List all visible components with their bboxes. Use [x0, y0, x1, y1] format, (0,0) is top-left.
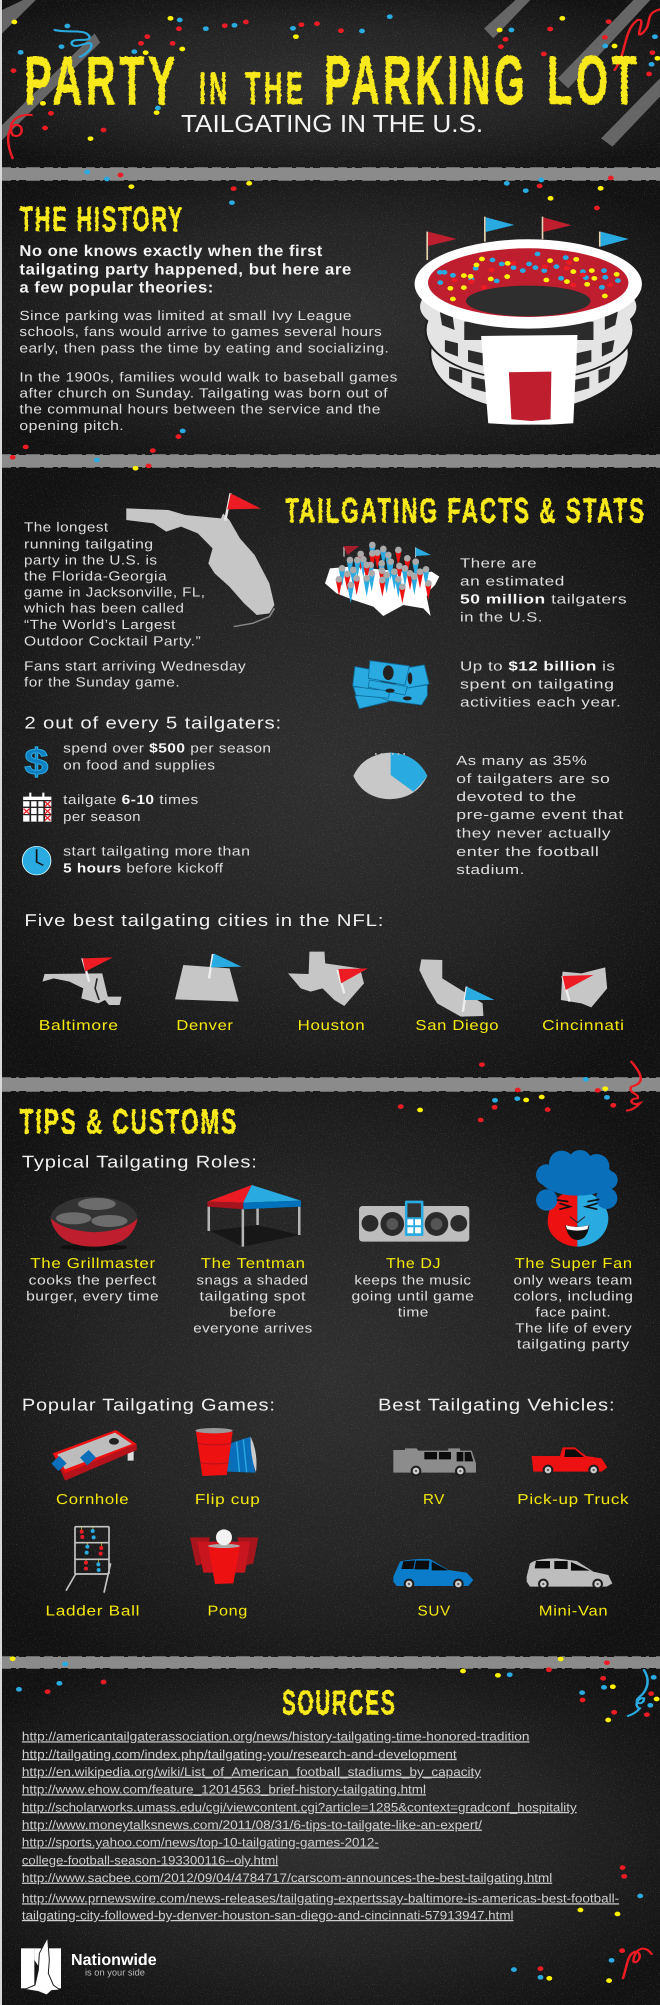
text: tailgate times: per season [63, 809, 141, 824]
parking lot stripes [2, 0, 660, 147]
role: dj: keeps the music [354, 1273, 471, 1288]
vehicle: pickup truck: Pick-up Truck [517, 1491, 629, 1507]
logo: nationwide: is on your side [85, 1967, 145, 1977]
role: super fan: The life of every [515, 1321, 632, 1336]
role: grillmaster: The Grillmaster [30, 1255, 156, 1271]
source links: http://americantailgaterassociation.org/news/history-tailgating-time-honored-tradition [22, 1730, 529, 1743]
theory one: Since parking was limited at small Ivy League [19, 308, 352, 323]
source links: http://en.wikipedia.org/wiki/List_of_American_football_stadiums_by_capacity [22, 1765, 481, 1779]
text: longest running party: The longest [24, 520, 109, 535]
title: party in the parking lot [24, 42, 641, 119]
city: denver [175, 953, 241, 1033]
city: cincinnati: Cincinnati [542, 1017, 625, 1033]
vehicle: rv: RV [423, 1491, 445, 1507]
role: dj: going until game [351, 1289, 474, 1304]
panel: facts and stats [22, 491, 646, 877]
icon: football pie chart [353, 753, 427, 799]
city: san diego: San Diego [415, 1017, 499, 1033]
text: 35 percent: pre-game event that [456, 807, 624, 822]
text: tailgate times: tailgate 6-10 times [63, 792, 199, 807]
theory two: opening pitch. [19, 418, 124, 433]
text: spend: on food and supplies [63, 758, 216, 772]
game: pong: Pong [208, 1603, 248, 1619]
text: 50 million: There are [460, 556, 537, 570]
role: tentman [193, 1185, 313, 1336]
source links: tailgating-city-followed-by-denver-houston-san-diego-and-cincinnati-57913947.html [22, 1908, 513, 1922]
intro text: a few popular theories: [19, 278, 214, 296]
heading: five best cities: Five best tailgating cities in the NFL: [24, 911, 384, 930]
text: 35 percent: of tailgaters are so [456, 771, 610, 786]
section dividers [2, 168, 660, 1668]
header: title region [2, 0, 660, 468]
game: flip cup [195, 1428, 261, 1507]
text: 35 percent [456, 753, 624, 877]
icon: florida map with flag [126, 493, 274, 627]
game: cornhole: Cornhole [56, 1491, 129, 1507]
title: party in the parking lot: THE [245, 63, 306, 114]
panel: the history [19, 200, 642, 433]
vehicle: minivan [527, 1558, 612, 1619]
city: cincinnati [542, 967, 625, 1033]
text: longest running party [24, 520, 246, 690]
panel: the history: THE HISTORY [20, 200, 184, 239]
role: tentman: before [229, 1305, 277, 1320]
theory two: after church on Sunday. Tailgating was born out of [19, 386, 388, 401]
city: houston: Houston [298, 1017, 365, 1033]
role: dj: The DJ [386, 1255, 441, 1271]
vehicle: rv [393, 1448, 476, 1507]
role: super fan: face paint. [535, 1305, 611, 1320]
heading: popular games: Popular Tailgating Games: [22, 1395, 276, 1414]
game: pong [190, 1529, 258, 1619]
heading: tips and customs: TIPS & CUSTOMS [20, 1102, 238, 1141]
panel: sources [13, 1659, 657, 1981]
role: grillmaster [26, 1197, 159, 1304]
text: start tailgating: start tailgating more than [63, 844, 250, 859]
panel: games [22, 1395, 276, 1619]
role: dj [351, 1201, 474, 1320]
role: dj: time [398, 1305, 429, 1320]
text: longest running party: which has been called [24, 601, 184, 615]
game: cornhole [51, 1430, 137, 1507]
text: 35 percent: enter the football [456, 844, 599, 859]
text: spend: spend over $500 per season [63, 741, 271, 756]
game: flip cup: Flip cup [195, 1491, 261, 1507]
text: start tailgating [63, 844, 250, 875]
panel: stat icons [325, 542, 439, 799]
text: 35 percent: they never actually [456, 826, 611, 840]
source links: http://www.ehow.com/feature_12014563_brief-history-tailgating.html [22, 1783, 426, 1796]
role: super fan: only wears team [513, 1273, 633, 1288]
vehicle: pickup truck [517, 1447, 629, 1507]
text: spend [63, 741, 271, 772]
game: ladder ball: Ladder Ball [45, 1603, 140, 1619]
source links: college-football-season-193300116--oly.html [22, 1853, 278, 1867]
city: san diego [415, 959, 499, 1033]
subtitle: TAILGATING IN THE U.S. [181, 110, 483, 137]
panel: five best cities [24, 911, 625, 1033]
theory one: schools, fans would arrive to games several hours [19, 324, 382, 339]
text: 12 billion: Up to $12 billion is [460, 659, 615, 674]
text: 12 billion [460, 659, 621, 710]
role: super fan: tailgating party [517, 1337, 630, 1352]
text: longest running party: Fans start arriving Wednesday [24, 659, 246, 674]
text: 50 million [460, 556, 627, 624]
text: 35 percent: As many as 35% [456, 753, 587, 768]
city: denver: Denver [176, 1017, 234, 1033]
intro text: tailgating party happened, but here are [19, 260, 352, 278]
title: party in the parking lot: PARTY [24, 42, 179, 119]
text: 50 million: 50 million tailgaters [460, 592, 627, 607]
city: baltimore: Baltimore [39, 1017, 119, 1033]
source links: http://www.moneytalksnews.com/2011/08/31/6-tips-to-tailgate-like-an-expert/ [22, 1818, 482, 1832]
theory one: early, then pass the time by eating and socializing. [19, 341, 389, 356]
confetti and streamers [13, 1659, 657, 1981]
role: super fan: colors, including [513, 1289, 633, 1304]
vehicle: minivan: Mini-Van [539, 1603, 608, 1619]
text: longest running party: “The World’s Largest [24, 617, 176, 632]
source links: http://tailgating.com/index.php/tailgating-you/research-and-development [22, 1747, 457, 1761]
text: longest running party: party in the U.S. is [24, 553, 157, 567]
text: 12 billion: spent on tailgating [460, 677, 615, 692]
icon: money stack [353, 661, 429, 709]
text: 35 percent: devoted to the [456, 789, 577, 804]
role: tentman: everyone arrives [193, 1321, 313, 1336]
icon: dollar sign: $ [24, 741, 48, 783]
vehicle: suv: SUV [418, 1603, 451, 1619]
text: 50 million: an estimated [460, 574, 565, 588]
heading: typical roles: Typical Tailgating Roles: [22, 1152, 258, 1171]
source links: http://www.sacbee.com/2012/09/04/4784717/carscom-announces-the-best-tailgating.html [22, 1871, 552, 1885]
theory one [19, 308, 389, 356]
text: 35 percent: stadium. [456, 862, 525, 877]
icon: stadium [415, 217, 642, 425]
text: tailgate times [63, 792, 199, 824]
role: grillmaster: burger, every time [26, 1289, 159, 1304]
text: 50 million: in the U.S. [460, 610, 543, 624]
confetti and streamer [401, 1062, 641, 1120]
heading: 2 out of every 5: 2 out of every 5 tailgaters: [24, 713, 282, 732]
icon: us map with pins [325, 542, 439, 616]
city: baltimore [39, 957, 122, 1033]
text: longest running party: Outdoor Cocktail Party.” [24, 634, 201, 648]
text: 12 billion: activities each year. [460, 695, 621, 710]
role: tentman: The Tentman [201, 1255, 306, 1271]
streamers [8, 9, 660, 158]
theory two: In the 1900s, families would walk to baseball games [19, 370, 398, 385]
role: super fan [513, 1150, 633, 1352]
theory two: the communal hours between the service and the [19, 402, 381, 417]
source links: http://scholarworks.umass.edu/cgi/viewcontent.cgi?article=1285&context=gradconf_hospitality [22, 1800, 577, 1814]
logo: nationwide [21, 1937, 157, 1995]
city: houston [288, 952, 368, 1033]
intro text: No one knows exactly when the first [19, 242, 323, 259]
title: party in the parking lot: IN [199, 63, 230, 114]
heading: best vehicles: Best Tailgating Vehicles: [378, 1395, 615, 1414]
theory two [19, 370, 398, 433]
source links [22, 1730, 619, 1922]
role: tentman: tailgating spot [200, 1289, 306, 1304]
text: longest running party: for the Sunday game. [24, 675, 180, 690]
panel: sources: SOURCES [282, 1683, 396, 1722]
panel: vehicles [378, 1395, 629, 1619]
role: grillmaster: cooks the perfect [29, 1273, 157, 1288]
panel: tips and customs [20, 1062, 641, 1352]
icon: clock [22, 846, 51, 875]
game: ladder ball [45, 1527, 140, 1619]
role: super fan: The Super Fan [515, 1255, 633, 1271]
source links: http://sports.yahoo.com/news/top-10-tailgating-games-2012- [22, 1836, 379, 1849]
text: longest running party: running tailgating [24, 537, 154, 551]
text: start tailgating: 5 hours before kickoff [63, 861, 223, 875]
logo: nationwide: Nationwide [71, 1951, 157, 1969]
confetti [13, 17, 657, 468]
vehicle: suv [393, 1559, 473, 1619]
text: longest running party: the Florida-Georgia [24, 569, 167, 583]
icon: calendar [23, 793, 51, 822]
text: longest running party: game in Jacksonville, FL, [24, 585, 205, 599]
role: tentman: snags a shaded [197, 1273, 309, 1288]
intro text [19, 242, 352, 296]
